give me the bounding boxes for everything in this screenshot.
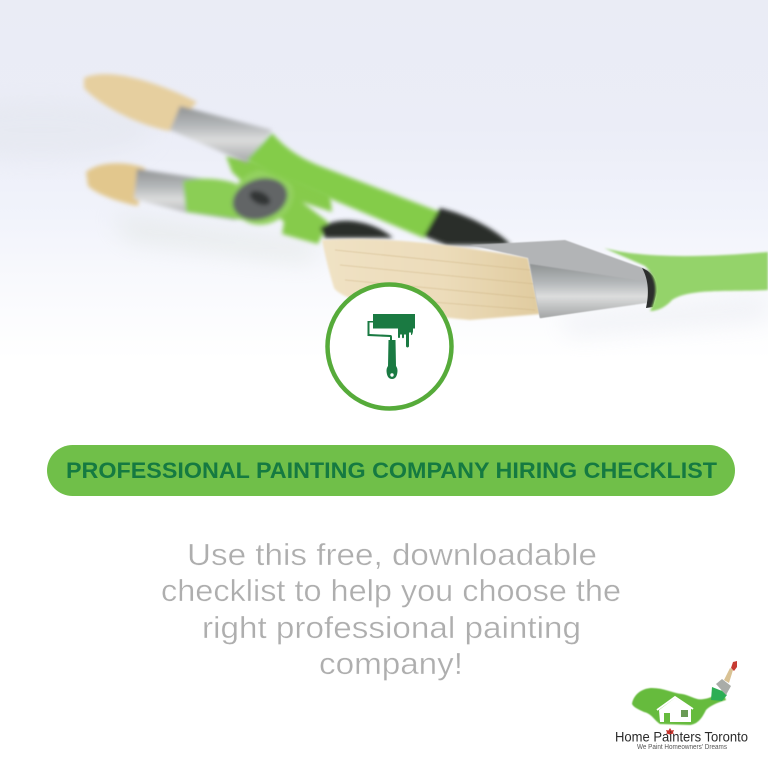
front brush — [322, 239, 768, 320]
photo: paint brushes — [84, 74, 768, 335]
body text: company! — [319, 646, 463, 681]
logo: Home Painters Toronto — [615, 661, 748, 751]
logo tagline: We Paint Homeowners' Dreams — [637, 744, 727, 751]
brush shadows — [110, 215, 768, 335]
body text: checklist to help you choose the — [161, 573, 621, 608]
body text — [161, 537, 621, 681]
body text: right professional painting — [202, 610, 581, 645]
body text: Use this free, downloadable — [187, 537, 597, 572]
logo: house — [657, 697, 693, 722]
icon: paint roller badge — [328, 284, 452, 408]
logo: maple leaf — [666, 728, 674, 735]
heading pill — [47, 445, 735, 496]
logo: brush — [711, 661, 737, 701]
photo background — [0, 0, 768, 360]
logo wordmark: Home Painters Toronto — [615, 728, 748, 744]
heading text: PROFESSIONAL PAINTING COMPANY HIRING CHECKLIST — [66, 458, 717, 483]
logo: paint swoosh — [632, 688, 726, 725]
back left brush — [86, 156, 393, 244]
back top brush — [84, 74, 511, 245]
icon: paint roller — [368, 314, 415, 379]
